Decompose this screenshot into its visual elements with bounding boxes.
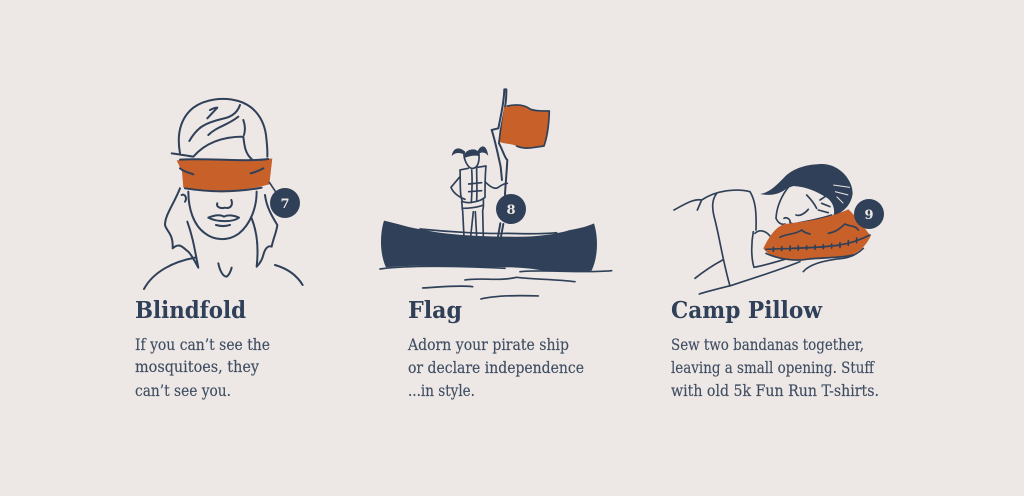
panel: camp pillow (671, 164, 884, 400)
illustration: girl on canoe with flag (380, 89, 612, 299)
orange blindfold band (177, 158, 272, 191)
illustration: blindfolded woman (144, 99, 303, 289)
flag shadow edge (507, 105, 549, 148)
heading: Camp Pillow: Camp Pillow (671, 296, 823, 324)
hair (760, 164, 853, 216)
panel: blindfold (135, 99, 303, 400)
text block: flag description: or declare independence (408, 359, 584, 377)
face outline (182, 192, 257, 239)
girl head and pigtails (464, 152, 479, 168)
orange pillow (763, 209, 871, 261)
canoe hull (381, 221, 597, 271)
ear and face (776, 174, 832, 224)
text block: blindfold description (135, 336, 270, 400)
badge: number 9: 9 (864, 208, 874, 223)
badge: number 8: 8 (506, 203, 516, 218)
badge: number 8 (496, 194, 526, 224)
text block: camp pillow description: leaving a small opening. Stuff (671, 359, 875, 377)
illustration: sleeping woman on pillow (674, 164, 871, 294)
text block: flag description: ...in style. (408, 382, 475, 400)
text block: camp pillow description (671, 336, 879, 400)
text block: flag description (407, 336, 584, 400)
heading: Flag: Flag (408, 296, 462, 324)
text block: blindfold description: If you can’t see the (135, 336, 270, 354)
text block: camp pillow description: with old 5k Fun Run T-shirts. (671, 382, 879, 400)
heading: Blindfold: Blindfold (135, 296, 246, 324)
badge: number 7: 7 (280, 197, 290, 212)
life jacket and arms (451, 166, 507, 203)
pillow seam and creases (766, 224, 870, 260)
long hair and shoulders (144, 188, 303, 289)
text block: blindfold description: can’t see you. (135, 382, 231, 400)
panel: flag (380, 89, 612, 400)
hair highlight lines (833, 185, 850, 203)
body and arm (674, 190, 863, 294)
badge: number 7 (270, 188, 300, 218)
flag pole (492, 89, 507, 239)
text block: flag description: Adorn your pirate ship (407, 336, 569, 354)
canoe inner rim (420, 229, 557, 234)
badge: number 9 (854, 199, 884, 229)
text block: camp pillow description: Sew two bandanas together, (671, 336, 864, 354)
water lines (380, 266, 612, 299)
number leader line (269, 182, 277, 193)
hair outline (172, 99, 267, 159)
text block: blindfold description: mosquitoes, they (135, 358, 259, 376)
band edges (180, 159, 268, 191)
girl legs (462, 198, 483, 237)
orange flag (500, 105, 549, 148)
